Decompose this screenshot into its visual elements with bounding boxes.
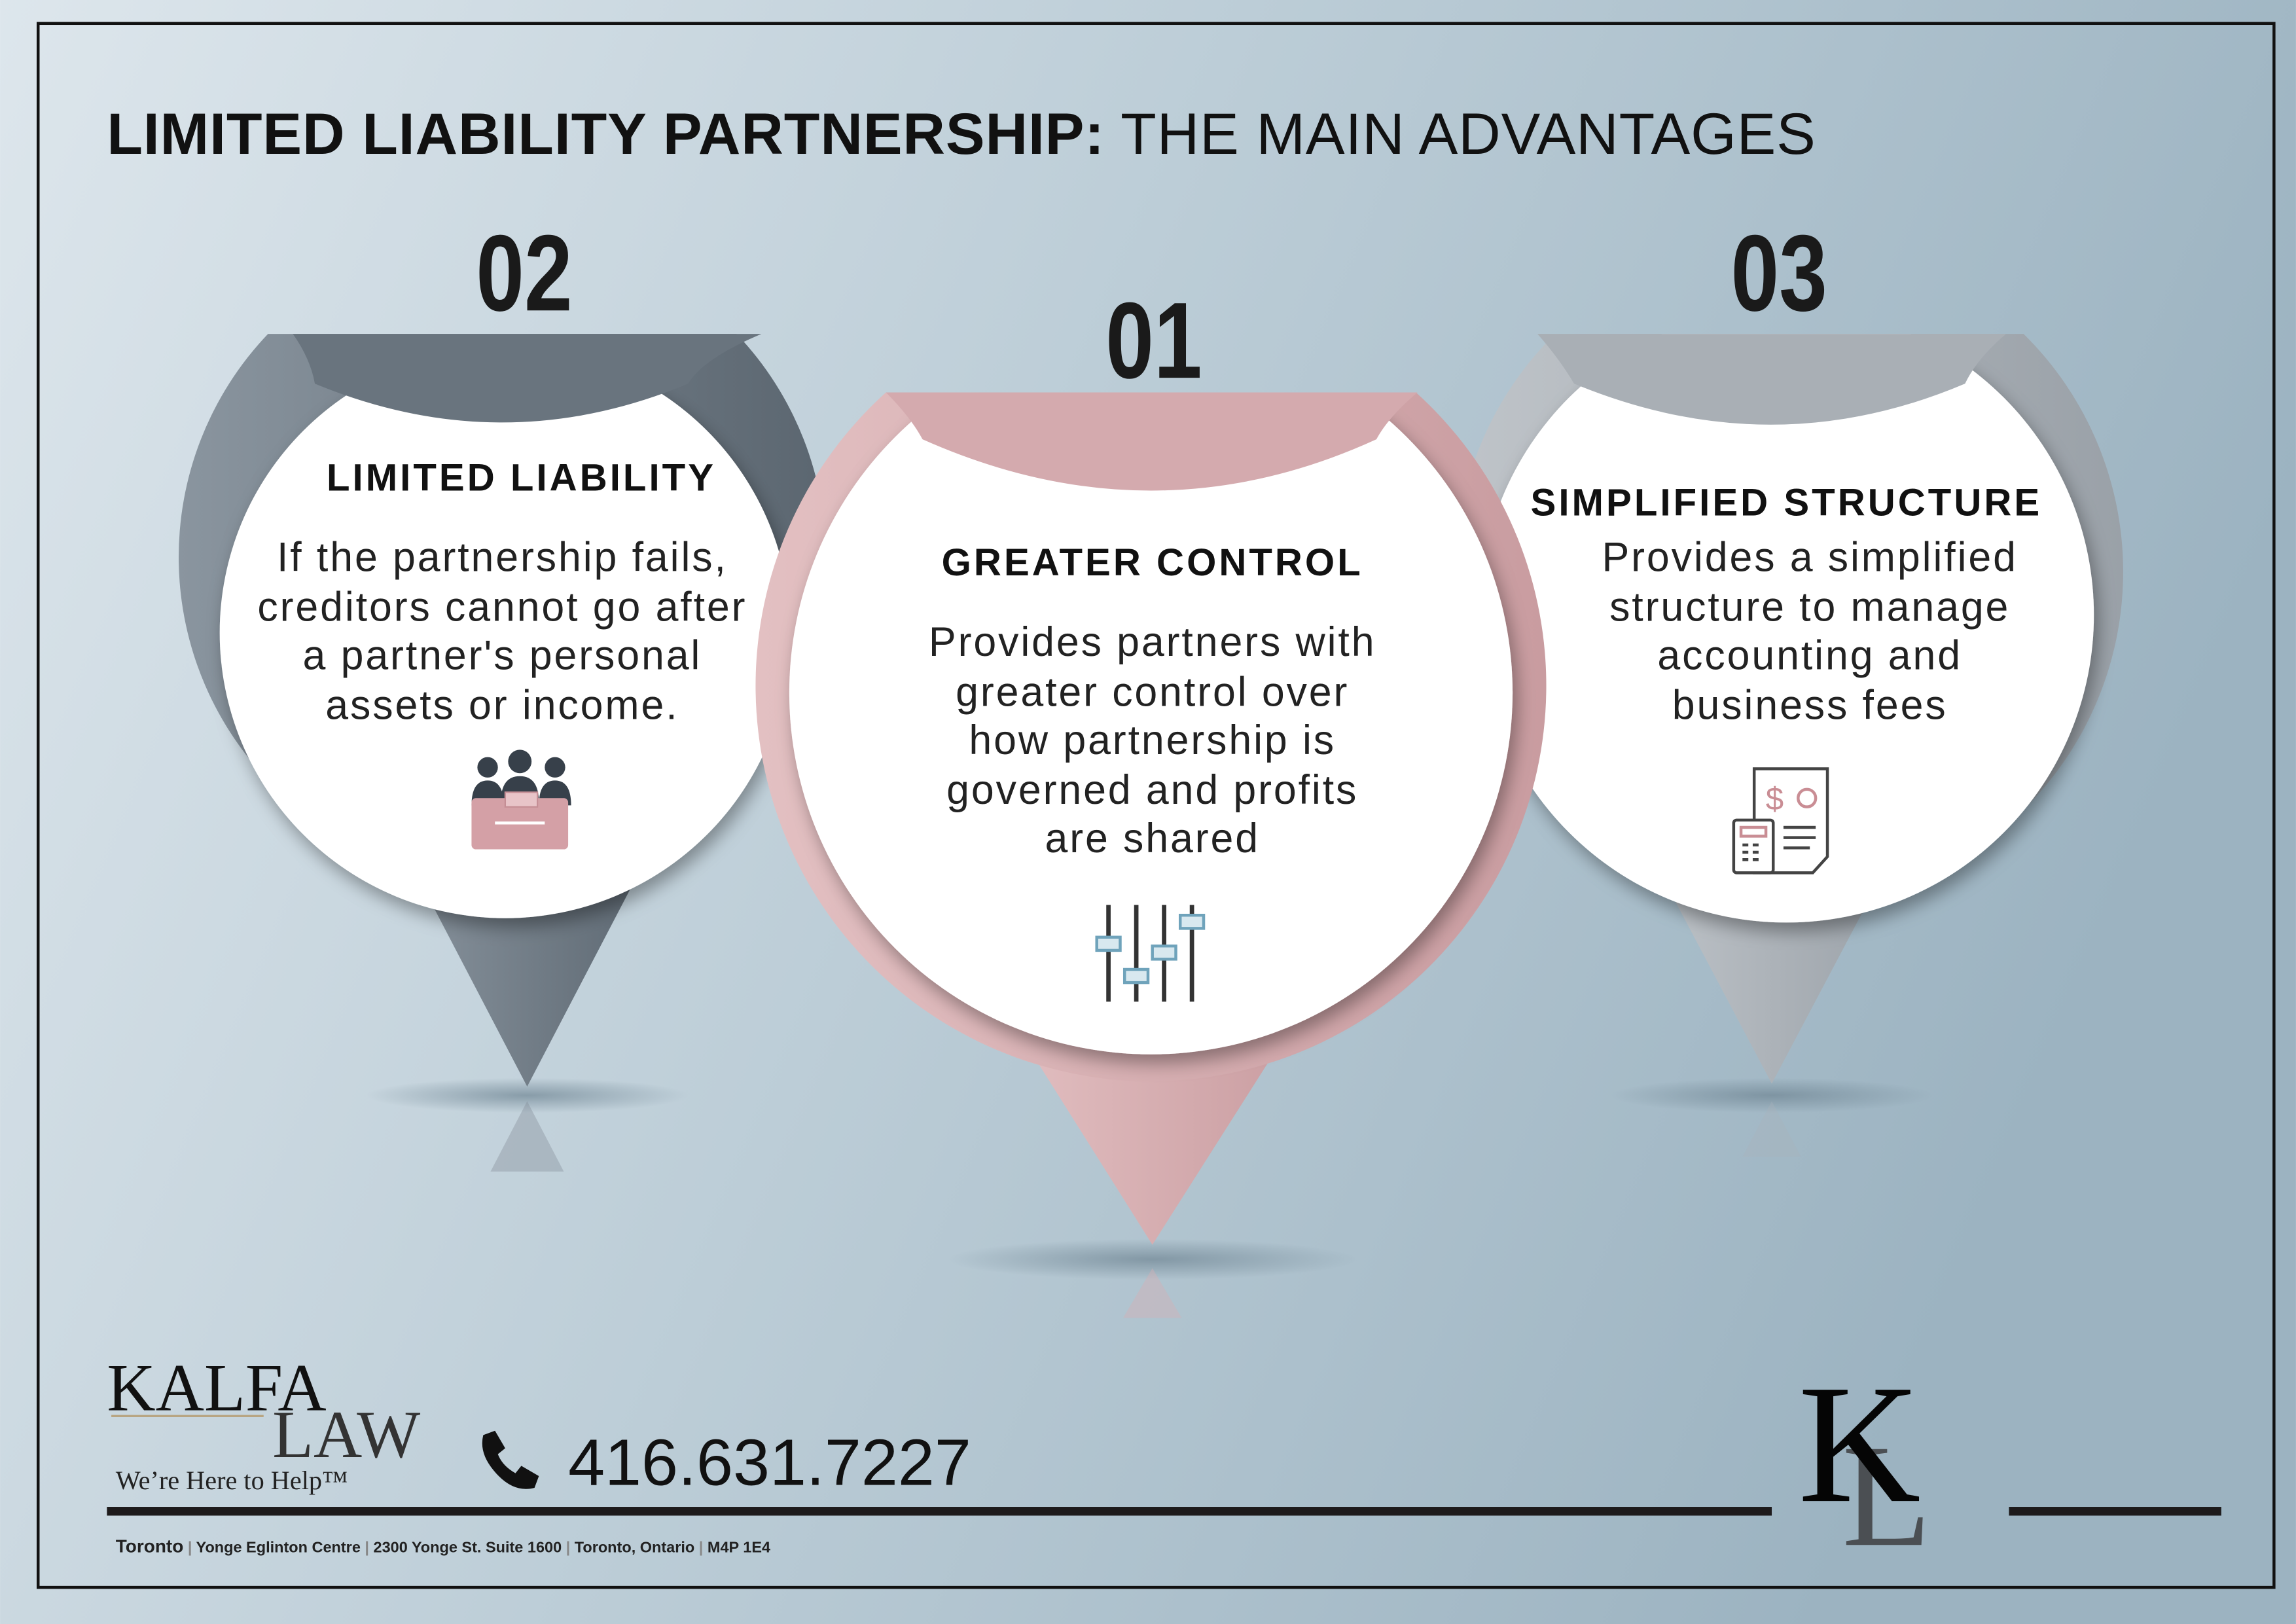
- pin 03: simplified structure: [1456, 212, 2123, 1157]
- address: Toronto | Yonge Eglinton Centre | 2300 Yonge St. Suite 1600 | Toronto, Ontario | M4P 1E4: [116, 1536, 770, 1556]
- logo: Kalfa Law: [107, 1350, 420, 1495]
- icon: financial document: $: [1766, 781, 1784, 817]
- logo: Kalfa Law: We’re Here to Help™: [116, 1466, 348, 1495]
- text: simplified structure: accounting and: [1657, 632, 1962, 678]
- text: greater control: how partnership is: [969, 717, 1336, 763]
- title: LIMITED LIABILITY PARTNERSHIP: THE MAIN ADVANTAGES: [107, 101, 1816, 166]
- logo: Kalfa Law: KALFA: [107, 1350, 327, 1425]
- logo: Kalfa Law: LAW: [272, 1398, 420, 1472]
- heading: limited liability: LIMITED LIABILITY: [327, 456, 716, 499]
- phone number: 416.631.7227: [568, 1426, 971, 1499]
- text: greater control: governed and profits: [946, 767, 1358, 813]
- text: simplified structure: Provides a simplified: [1602, 534, 2018, 580]
- logo: KL monogram: K: [1798, 1350, 1921, 1538]
- text: limited liability: If the partnership fails,: [277, 534, 728, 580]
- text: limited liability: creditors cannot go after: [257, 585, 747, 630]
- heading: simplified structure: SIMPLIFIED STRUCTURE: [1531, 481, 2042, 524]
- heading: greater control: GREATER CONTROL: [942, 541, 1363, 584]
- number 01: 01: [1105, 280, 1202, 401]
- icon: sliders: [1097, 905, 1204, 1001]
- text: limited liability: assets or income.: [325, 682, 679, 728]
- text: simplified structure: structure to manage: [1609, 585, 2010, 630]
- icon: phone: [482, 1431, 539, 1489]
- pin 01: greater control: [755, 280, 1547, 1318]
- number 03: 03: [1731, 212, 1827, 334]
- number 02: 02: [476, 212, 573, 334]
- text: simplified structure: business fees: [1672, 682, 1948, 728]
- logo: KL monogram: L: [1842, 1415, 1931, 1577]
- text: greater control: are shared: [1045, 816, 1260, 861]
- pin 02: limited liability: [179, 212, 826, 1172]
- icon: financial document: [1734, 769, 1827, 873]
- icon: people with briefcase: [471, 749, 571, 850]
- text: greater control: Provides partners with: [929, 619, 1376, 665]
- text: greater control: greater control over: [956, 669, 1349, 715]
- text: limited liability: a partner's personal: [303, 632, 702, 678]
